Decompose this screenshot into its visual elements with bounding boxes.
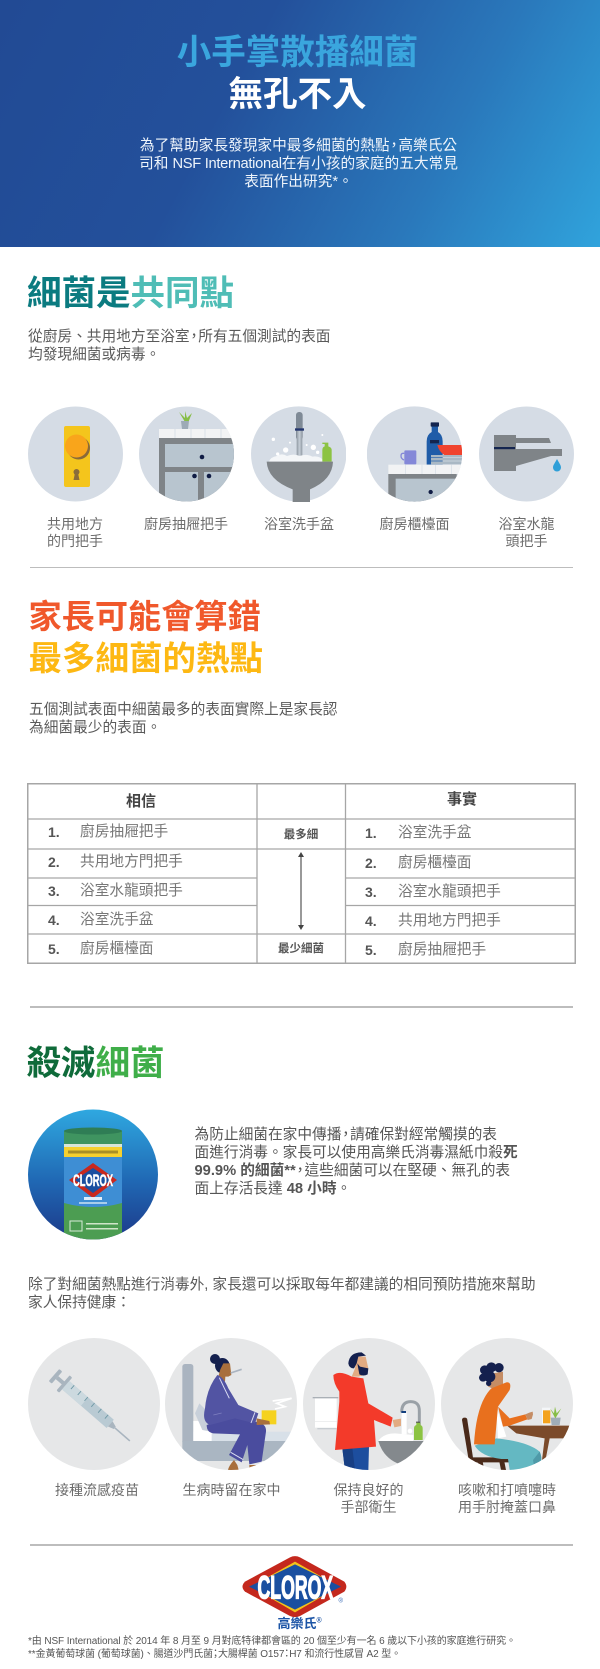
fact 5 (365, 941, 486, 958)
fact 5: 5. (365, 942, 377, 958)
text: disinfect advice: 面進行消毒。家長可以使用高樂氏消毒濕紙巾殺死 (194, 1145, 518, 1161)
text: germs common: 從廚房、共用地方至浴室，所有五個測試的表面 (28, 329, 330, 345)
intro text: 表面作出研究*。 (244, 174, 353, 190)
belief 4 (48, 911, 153, 928)
product: disinfecting wipes canister: CLOROX (73, 1171, 113, 1190)
label: flu vaccine: 接種流感疫苗 (55, 1482, 139, 1498)
logo: Clorox: ® (338, 1598, 343, 1605)
icon: flu vaccine syringe (28, 1338, 160, 1470)
intro text (139, 137, 458, 190)
icon: good hand hygiene (303, 1338, 435, 1470)
text: prevention advice: 除了對細菌熱點進行消毒外, 家長還可以採取每年都建議的相同預防措施來幫助 (28, 1277, 536, 1293)
belief 1: 廚房抽屜把手 (80, 824, 168, 840)
subtitle: 無孔不入 (228, 76, 366, 114)
footnotes: *由 NSF International 於 2014 年 8 月至 9 月對底特律都會區的 20 個至少有一名 6 歲以下小孩的家庭進行研究。 (28, 1636, 516, 1647)
fact 3: 3. (365, 884, 377, 900)
logo: Clorox (242, 1556, 346, 1618)
belief 4: 4. (48, 912, 60, 928)
label: hand hygiene: 保持良好的 (334, 1482, 404, 1498)
icon: cover coughs and sneezes (441, 1338, 573, 1470)
product: disinfecting wipes canister (28, 1110, 158, 1240)
belief 1: 1. (48, 824, 60, 840)
fact 5: 廚房抽屜把手 (398, 942, 486, 958)
intro text: 為了幫助家長發現家中最多細菌的熱點，高樂氏公 (140, 138, 457, 154)
label: hand hygiene: 手部衛生 (340, 1498, 396, 1514)
belief 2: 共用地方門把手 (80, 854, 183, 870)
label: sink: 浴室洗手盆 (264, 516, 334, 532)
belief 5: 廚房櫃檯面 (80, 941, 153, 957)
heading: parents wrong: 家長可能會算錯 (28, 599, 261, 636)
label: door handle (47, 516, 103, 549)
heading: kill germs: 殺滅細菌 (26, 1045, 164, 1083)
icon: door handle (28, 406, 123, 502)
fact 4: 4. (365, 913, 377, 929)
fact 3: 浴室水龍頭把手 (398, 884, 501, 900)
belief 1 (48, 823, 168, 840)
label: faucet handle: 頭把手 (506, 533, 548, 549)
title: 小手掌散播細菌 (177, 34, 418, 72)
header banner (0, 0, 600, 247)
icon: kitchen countertop (367, 406, 462, 502)
belief 5 (48, 940, 153, 957)
text: disinfect advice: 為防止細菌在家中傳播，請確保對經常觸摸的表 (194, 1127, 497, 1143)
icon: kitchen drawer handle (139, 406, 234, 502)
label: faucet handle: 浴室水龍 (498, 516, 554, 532)
belief 2: 2. (48, 854, 60, 870)
label: cover coughs: 用手肘掩蓋口鼻 (458, 1498, 556, 1514)
text: disinfect advice (194, 1126, 518, 1197)
header: belief: 相信 (126, 793, 156, 810)
text: prevention advice: 家人保持健康： (28, 1295, 131, 1311)
fact 2 (365, 854, 471, 871)
label: countertop: 廚房櫃檯面 (380, 516, 450, 532)
icon: stay home when sick (165, 1338, 297, 1470)
label: cover coughs (458, 1482, 556, 1514)
text: prevention advice (28, 1276, 536, 1311)
text: parents wrong (29, 701, 337, 736)
fact 1: 1. (365, 825, 377, 841)
icon: bathroom faucet handle (479, 406, 574, 502)
logo text: 高樂氏® (278, 1616, 322, 1631)
heading: germs common: 細菌是共同點 (27, 275, 234, 313)
label: faucet handle (498, 516, 554, 549)
label: hand hygiene (334, 1482, 404, 1514)
fact 1: 浴室洗手盆 (398, 825, 471, 841)
belief 4: 浴室洗手盆 (80, 912, 153, 928)
text: germs common: 均發現細菌或病毒。 (28, 347, 160, 363)
intro text: 司和 NSF International在有小孩的家庭的五大常見 (139, 156, 458, 172)
header: fact: 事實 (447, 791, 477, 808)
least germs label: 最少細菌 (278, 943, 324, 955)
belief 3: 3. (48, 883, 60, 899)
label: drawer handle: 廚房抽屜把手 (144, 516, 228, 532)
fact 4: 共用地方門把手 (398, 913, 501, 929)
text: disinfect advice: 99.9% 的細菌**，這些細菌可以在堅硬、無孔的表 (194, 1163, 510, 1179)
footnotes: **金黃葡萄球菌 (葡萄球菌)、腸道沙門氏菌；大腸桿菌 O157：H7 和流行性感冒 A2 型。 (28, 1648, 401, 1660)
icon: bathroom sink (251, 406, 346, 502)
table: belief vs fact (27, 783, 576, 964)
belief 5: 5. (48, 941, 60, 957)
fact 2: 2. (365, 855, 377, 871)
label: door handle: 的門把手 (47, 533, 103, 549)
heading: germ hot spots: 最多細菌的熱點 (28, 641, 263, 678)
text: parents wrong: 五個測試表面中細菌最多的表面實際上是家長認 (29, 702, 337, 718)
text: germs common (28, 328, 330, 363)
arrow: most to least (298, 852, 304, 930)
text: disinfect advice: 面上存活長達 48 小時。 (194, 1181, 351, 1197)
label: door handle: 共用地方 (47, 516, 103, 532)
label: cover coughs: 咳嗽和打噴嚏時 (458, 1482, 556, 1498)
fact 2: 廚房櫃檯面 (398, 855, 471, 871)
text: parents wrong: 為細菌最少的表面。 (29, 720, 161, 736)
most germs label: 最多細 (284, 829, 318, 841)
label: stay home: 生病時留在家中 (182, 1482, 280, 1498)
belief 3: 浴室水龍頭把手 (80, 883, 183, 899)
footnotes (28, 1635, 516, 1660)
fact 1 (365, 824, 471, 841)
